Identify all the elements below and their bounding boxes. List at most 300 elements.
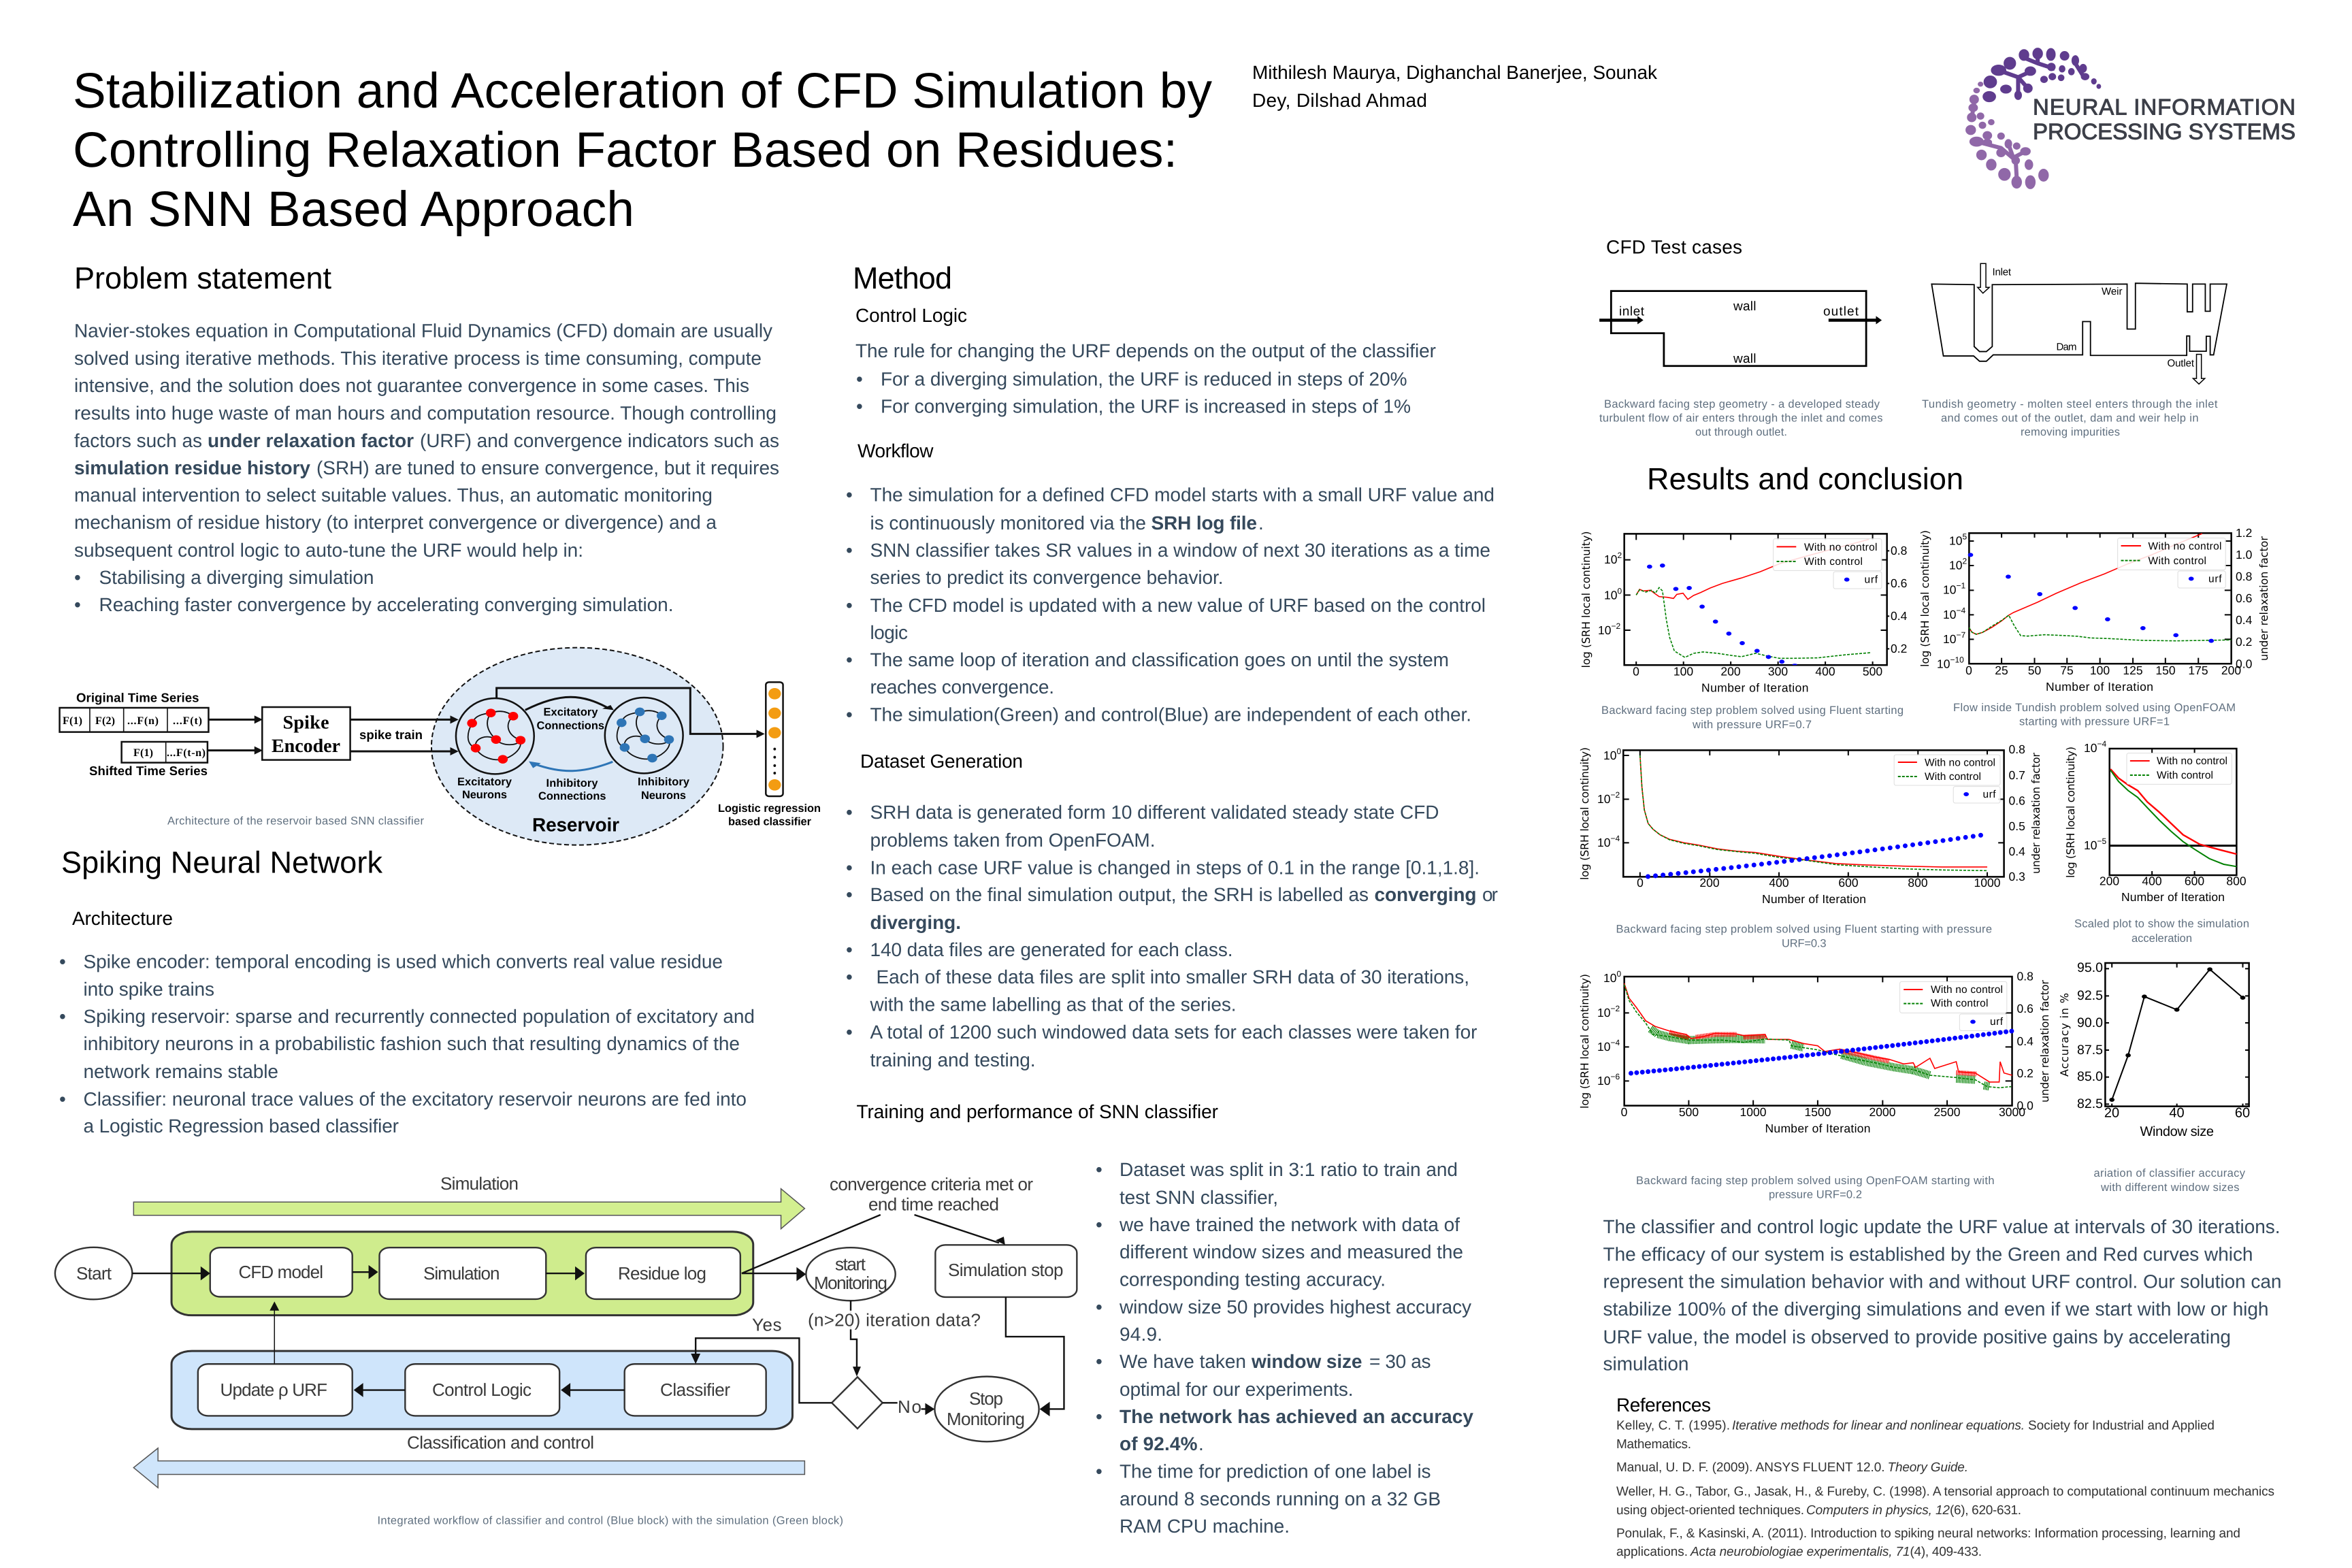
chart: backward step OpenFOAM URF 0.2: 10 [1603, 971, 1616, 985]
text block: workflow: SNN classifier takes SR values in a window of next 30 iterations as a time [870, 540, 1490, 561]
chart: classifier accuracy vs window size: 20 [2104, 1105, 2119, 1120]
chart: SNN classifier architecture diagram: Excitatory [543, 706, 598, 719]
chart: SNN classifier architecture diagram: Shifted Time Series [89, 764, 208, 778]
chart: backward step fluent URF 0.3: 10 [1603, 749, 1616, 762]
text block: training bullets: . [1198, 1433, 1204, 1454]
text block: dataset generation: Each of these data files are split into smaller SRH data of 30 iterations, [877, 966, 1469, 987]
chart: backward step fluent URF 0.3: 0.5 [2009, 819, 2025, 833]
chart: backward step fluent URF 0.7: 2 [1617, 551, 1622, 560]
chart: scaled acceleration plot: −4 [2097, 739, 2106, 749]
chart: tundish OpenFOAM URF 1: 175 [2188, 664, 2208, 677]
text block: dataset generation: • [846, 966, 853, 987]
text block: dataset generation [846, 802, 1498, 1071]
sub-heading: dataset generation: Dataset Generation [860, 751, 1023, 772]
chart: tundish OpenFOAM URF 1: 200 [2221, 664, 2241, 677]
chart: backward step OpenFOAM URF 0.2: 1500 [1805, 1105, 1831, 1119]
title: An SNN Based Approach [73, 182, 634, 237]
chart: backward step fluent URF 0.3: 10 [1597, 792, 1610, 806]
chart: backward step fluent URF 0.3: −4 [1610, 834, 1620, 843]
heading: references: References [1616, 1394, 1711, 1416]
chart: integrated workflow diagram: Simulation [423, 1263, 500, 1284]
chart: SNN classifier architecture diagram: ...F(t-n) [167, 747, 206, 759]
chart: SNN classifier architecture diagram: Connections [538, 790, 606, 802]
chart: backward step OpenFOAM URF 0.2: 2500 [1934, 1105, 1961, 1119]
text block: references list: Theory Guide. [1888, 1460, 1968, 1475]
chart: tundish OpenFOAM URF 1: 0.0 [2236, 657, 2253, 671]
chart: backward facing step geometry: inlet [1619, 305, 1645, 318]
text block: training bullets: test SNN classifier, [1120, 1187, 1278, 1208]
chart: backward step fluent URF 0.3: 800 [1908, 876, 1928, 889]
text block: dataset generation: diverging. [870, 912, 961, 933]
sub-heading: control logic: Control Logic [855, 305, 967, 326]
text block: problem statement: manual intervention to select suitable values. Thus, an automatic monitoring [74, 485, 713, 506]
chart: scaled acceleration plot: With no control [2157, 755, 2227, 767]
chart: SNN classifier architecture diagram: ...F(t) [173, 715, 202, 727]
text block: workflow: The simulation for a defined CFD model starts with a small URF value and [870, 485, 1494, 505]
chart: SNN classifier architecture diagram: based classifier [728, 815, 812, 828]
text block: dataset generation: In each case URF value is changed in steps of 0.1 in the range [0.1,1.8]. [870, 858, 1480, 878]
title [73, 63, 1213, 237]
text block: training bullets: • [1096, 1159, 1102, 1180]
chart: tundish OpenFOAM URF 1: 10 [1949, 558, 1962, 572]
chart: backward step OpenFOAM URF 0.2: 2000 [1869, 1105, 1896, 1119]
chart: integrated workflow diagram: (n>20) iteration data? [808, 1309, 981, 1330]
chart: SNN classifier architecture diagram: ...F(n) [127, 715, 159, 727]
text block: references list [1616, 1418, 2274, 1559]
caption: chart 5: Backward facing step problem solved using OpenFOAM starting with [1636, 1175, 1994, 1187]
heading: CFD test cases: CFD Test cases [1606, 237, 1742, 257]
chart: integrated workflow diagram: Simulation stop [948, 1260, 1063, 1280]
text block: SNN bullets: a Logistic Regression based classifier [83, 1115, 399, 1137]
chart: backward step OpenFOAM URF 0.2: 0.2 [2017, 1066, 2034, 1080]
text block: SNN bullets [59, 951, 755, 1137]
chart: integrated workflow diagram: Simulation [440, 1173, 519, 1194]
chart: backward facing step geometry: wall [1733, 299, 1756, 314]
chart: integrated workflow diagram: Classification and control [407, 1432, 594, 1452]
chart: backward step fluent URF 0.3: under relaxation factor [2029, 753, 2042, 874]
chart: SNN classifier architecture diagram: Reservoir [532, 814, 619, 836]
text block: problem statement: • [74, 594, 81, 615]
text block: references list: Ponulak, F., & Kasinski, A. (2011). Introduction to spiking neural networks: Information processing, learning and [1616, 1526, 2240, 1541]
text block: references list: Computers in physics, 12 [1806, 1503, 1950, 1518]
text block: training bullets: around 8 seconds running on a 32 GB [1120, 1488, 1441, 1509]
caption: tundish geometry [1922, 398, 2218, 438]
text block: training bullets: • [1096, 1296, 1102, 1318]
chart: backward step OpenFOAM URF 0.2: urf [1990, 1016, 2004, 1028]
chart: backward step OpenFOAM URF 0.2: 0.8 [2017, 969, 2034, 983]
chart: classifier accuracy vs window size: 60 [2235, 1105, 2250, 1120]
text block: dataset generation: or [1482, 884, 1498, 905]
chart: backward step OpenFOAM URF 0.2: log (SRH local continuity) [1578, 974, 1591, 1109]
chart: SNN classifier architecture diagram [60, 648, 821, 845]
chart: backward step OpenFOAM URF 0.2: 0.4 [2017, 1034, 2034, 1048]
caption: chart 3: Backward facing step problem solved using Fluent starting with pressure [1616, 923, 1992, 935]
chart: tundish OpenFOAM URF 1 [1918, 526, 2270, 693]
chart: classifier accuracy vs window size: 90.0 [2077, 1015, 2103, 1030]
chart: classifier accuracy vs window size: 85.0 [2077, 1069, 2103, 1084]
text block: training bullets: RAM CPU machine. [1120, 1516, 1290, 1537]
text block: problem statement: Navier-stokes equation in Computational Fluid Dynamics (CFD) domain are usually [74, 320, 772, 342]
text block: workflow: series to predict its convergence behavior. [870, 567, 1224, 588]
text block: dataset generation: 140 data files are generated for each class. [870, 939, 1233, 960]
chart: classifier accuracy vs window size: 92.5 [2077, 988, 2103, 1003]
text block: dataset generation: problems taken from OpenFOAM. [870, 830, 1156, 851]
reservoir shapes [60, 648, 783, 845]
chart: integrated workflow diagram [55, 1173, 1077, 1488]
chart: scaled acceleration plot: log (SRH local continuity) [2064, 747, 2077, 878]
chart: backward step fluent URF 0.7: 0.4 [1891, 609, 1908, 623]
chart: scaled acceleration plot: With control [2157, 770, 2213, 781]
text block: SNN bullets: Spiking reservoir: sparse and recurrently connected population of excitatory and [83, 1006, 755, 1027]
chart: backward step fluent URF 0.3 [1578, 742, 2042, 906]
chart: scaled acceleration plot: −5 [2097, 836, 2106, 846]
text block: references list: Acta neurobiologiae experimentalis, 71 [1690, 1545, 1910, 1559]
chart: scaled acceleration plot: 800 [2226, 874, 2247, 887]
text block: conclusion: represent the simulation behavior with and without URF control. Our solution can [1603, 1271, 2281, 1292]
chart: tundish OpenFOAM URF 1: −1 [1956, 581, 1965, 591]
text block: dataset generation: SRH data is generated form 10 different validated steady state CFD [870, 802, 1439, 823]
chart: backward step fluent URF 0.3: 0 [1637, 876, 1644, 889]
chart: backward step fluent URF 0.7 [1580, 531, 1908, 694]
chart: backward step fluent URF 0.7: 0 [1617, 587, 1622, 596]
text block: SNN bullets: inhibitory neurons in a probabilistic fashion such that resulting dynamics of the [83, 1033, 740, 1054]
chart: tundish OpenFOAM URF 1: 25 [1995, 664, 2008, 677]
chart: SNN classifier architecture diagram: Spike [283, 712, 329, 734]
sub-heading: workflow: Workflow [858, 440, 934, 461]
sub-heading: architecture: Architecture [72, 908, 173, 929]
text block: dataset generation: with the same labelling as that of the series. [870, 994, 1236, 1015]
text block: workflow: SRH log file [1152, 512, 1257, 534]
chart: backward step fluent URF 0.3: With control [1925, 771, 1981, 783]
text block: references list: Society for Industrial and Applied [2028, 1418, 2215, 1433]
chart: classifier accuracy vs window size: 95.0 [2077, 960, 2103, 975]
text block: SNN bullets: into spike trains [83, 979, 214, 1000]
text block: control logic: The rule for changing the URF depends on the output of the classifier [855, 340, 1436, 361]
chart: tundish OpenFOAM URF 1: 75 [2060, 664, 2074, 677]
chart: backward step fluent URF 0.3: 200 [1699, 876, 1720, 889]
chart: backward step OpenFOAM URF 0.2: With no control [1931, 984, 2003, 996]
caption: tundish geometry: Tundish geometry - molten steel enters through the inlet [1922, 398, 2218, 410]
chart: backward step fluent URF 0.3: 0.7 [2009, 768, 2025, 782]
icon: logo dots [1966, 48, 2100, 189]
chart: backward step fluent URF 0.7: With no control [1804, 542, 1877, 553]
logo: neural information processing systems [1966, 48, 2296, 189]
text block: references list: Manual, U. D. F. (2009). ANSYS FLUENT 12.0. [1616, 1460, 1885, 1475]
text block: dataset generation: • [846, 858, 853, 878]
chart: backward facing step geometry: outlet [1823, 305, 1859, 318]
chart: integrated workflow diagram: convergence criteria met or [830, 1174, 1033, 1194]
title: Stabilization and Acceleration of CFD Simulation by [73, 63, 1213, 118]
chart: backward step fluent URF 0.3: With no control [1925, 757, 1995, 769]
chart: scaled acceleration plot: 400 [2142, 874, 2162, 887]
authors: Mithilesh Maurya, Dighanchal Banerjee, Sounak [1252, 62, 1658, 83]
chart: tundish OpenFOAM URF 1: under relaxation factor [2257, 536, 2270, 661]
chart: integrated workflow diagram: start [835, 1254, 866, 1274]
caption: step geometry [1599, 398, 1882, 438]
text block: workflow: • [846, 540, 853, 561]
chart: backward step fluent URF 0.7: 10 [1598, 623, 1611, 637]
text block: conclusion: The classifier and control logic update the URF value at intervals of 30 iterations. [1603, 1216, 2280, 1237]
text block: problem statement: factors such as [74, 430, 202, 451]
chart: backward step fluent URF 0.7: 10 [1604, 553, 1617, 566]
chart: backward step OpenFOAM URF 0.2: 10 [1597, 1040, 1610, 1054]
chart: tundish OpenFOAM URF 1: 50 [2028, 664, 2041, 677]
chart: backward step fluent URF 0.3: 0.8 [2009, 742, 2025, 756]
text block: training bullets: Dataset was split in 3:1 ratio to train and [1120, 1159, 1458, 1180]
chart: classifier accuracy vs window size: 82.5 [2077, 1096, 2103, 1111]
chart: backward step fluent URF 0.3: 10 [1597, 836, 1610, 849]
chart: backward step OpenFOAM URF 0.2 [1578, 969, 2051, 1135]
text block: problem statement: simulation residue history [74, 457, 310, 478]
text block: workflow: • [846, 595, 853, 616]
chart: backward step fluent URF 0.7: Number of Iteration [1701, 681, 1809, 694]
chart: tundish OpenFOAM URF 1: 10 [1943, 583, 1956, 596]
chart: backward step fluent URF 0.7: 0.6 [1891, 576, 1907, 590]
chart: backward step fluent URF 0.7: 0.2 [1891, 642, 1907, 655]
heading: method: Method [853, 261, 952, 295]
chart: backward step fluent URF 0.3: 0.4 [2009, 845, 2025, 858]
text block: training bullets: we have trained the network with data of [1119, 1214, 1460, 1235]
text block: workflow: The same loop of iteration and classification goes on until the system [870, 649, 1449, 670]
chart: tundish OpenFOAM URF 1: −7 [1956, 630, 1965, 640]
text block: problem statement: solved using iterative methods. This iterative process is time consuming, compute [74, 348, 762, 369]
chart: scaled acceleration plot: 200 [2100, 874, 2119, 887]
text block: conclusion [1603, 1216, 2281, 1375]
chart: backward facing step geometry [1599, 291, 1882, 366]
text block: problem statement: (SRH) are tuned to ensure convergence, but it requires [316, 457, 779, 478]
chart: backward step fluent URF 0.3: 0.3 [2009, 870, 2025, 883]
text block: conclusion: simulation [1603, 1353, 1689, 1375]
caption: chart 2 [1953, 702, 2236, 728]
text block: dataset generation: • [846, 939, 853, 960]
text block: SNN bullets: Classifier: neuronal trace values of the excitatory reservoir neurons are fed into [83, 1089, 747, 1109]
text block: problem statement: subsequent control logic to auto-tune the URF would help in: [74, 540, 583, 561]
text block: control logic [855, 340, 1436, 416]
chart: backward step fluent URF 0.3: log (SRH local continuity) [1578, 747, 1591, 880]
chart: tundish OpenFOAM URF 1: 100 [2090, 664, 2110, 677]
chart: backward step OpenFOAM URF 0.2: 10 [1597, 1006, 1610, 1019]
chart: backward step fluent URF 0.7: 200 [1720, 664, 1741, 678]
chart: tundish OpenFOAM URF 1: 10 [1943, 632, 1956, 646]
text block: SNN bullets: • [59, 1089, 66, 1109]
text block: training bullets: window size 50 provides highest accuracy [1119, 1296, 1471, 1318]
text block: problem statement [74, 320, 779, 615]
chart: integrated workflow diagram: Monitoring [814, 1273, 887, 1293]
text block: problem statement: results into huge waste of man hours and computation resource. Though controlling [74, 403, 777, 423]
text block: conclusion: stabilize 100% of the diverging simulations and even if we start with low or high [1603, 1298, 2269, 1320]
chart: backward facing step geometry: wall [1733, 352, 1756, 366]
chart: tundish OpenFOAM URF 1: 0.4 [2236, 613, 2253, 627]
chart: backward step OpenFOAM URF 0.2: 0 [1616, 969, 1621, 979]
chart: tundish OpenFOAM URF 1: With no control [2148, 540, 2221, 553]
chart: tundish OpenFOAM URF 1: 125 [2123, 664, 2143, 677]
chart: SNN classifier architecture diagram: Encoder [272, 736, 340, 757]
caption: chart 3 [1616, 923, 1992, 950]
text block: workflow: • [846, 485, 853, 505]
text block: dataset generation: • [846, 802, 853, 823]
chart: backward step fluent URF 0.3: 600 [1838, 876, 1859, 889]
text block: problem statement: • [74, 567, 81, 588]
caption: chart 2: starting with pressure URF=1 [2019, 716, 2170, 728]
text block: problem statement: intensive, and the solution does not guarantee convergence in some cases. This [74, 375, 749, 396]
text block: training bullets: The time for prediction of one label is [1120, 1460, 1431, 1482]
sub-heading: training and performance: Training and performance of SNN classifier [856, 1101, 1218, 1122]
text block: workflow: logic [870, 622, 908, 643]
chart: tundish OpenFOAM URF 1: −4 [1956, 606, 1965, 615]
caption: chart 5 [1636, 1175, 1994, 1200]
logo: neural information processing systems: PROCESSING SYSTEMS [2033, 118, 2296, 144]
chart: backward step OpenFOAM URF 0.2: Number of Iteration [1765, 1122, 1870, 1135]
text block: SNN bullets: network remains stable [83, 1061, 278, 1082]
chart: SNN classifier architecture diagram: F(2) [95, 715, 115, 727]
chart: scaled acceleration plot: Number of Iteration [2121, 890, 2225, 904]
heading: results and conclusion: Results and conclusion [1647, 461, 1963, 496]
chart: backward step fluent URF 0.3: 400 [1769, 876, 1789, 889]
text block: dataset generation: • [846, 1022, 853, 1043]
chart: SNN classifier architecture diagram: Neurons [462, 789, 507, 801]
caption: chart 4: acceleration [2132, 932, 2192, 945]
text block: training bullets: 94.9. [1120, 1324, 1162, 1345]
chart: integrated workflow diagram: CFD model [238, 1262, 323, 1282]
chart: backward step fluent URF 0.3: −2 [1610, 790, 1620, 800]
chart: backward step fluent URF 0.7: 100 [1673, 664, 1693, 678]
text block: control logic: For a diverging simulation, the URF is reduced in steps of 20% [881, 369, 1407, 389]
caption: step geometry: out through outlet. [1695, 426, 1787, 438]
chart: integrated workflow diagram: Control Logic [432, 1379, 532, 1400]
text block: SNN bullets: • [59, 1006, 66, 1027]
text block: training bullets: of 92.4% [1120, 1433, 1198, 1454]
caption: chart 4: Scaled plot to show the simulation [2074, 917, 2249, 930]
caption: tundish geometry: and comes out of the outlet, dam and weir help in [1941, 412, 2198, 425]
chart: backward step OpenFOAM URF 0.2: With control [1931, 998, 1989, 1009]
text block: training bullets: window size [1251, 1351, 1362, 1372]
chart: SNN classifier architecture diagram: Inhibitory [638, 776, 690, 788]
caption: chart 1: with pressure URF=0.7 [1692, 719, 1812, 731]
text block: workflow: The simulation(Green) and control(Blue) are independent of each other. [870, 704, 1471, 725]
text block: control logic: For converging simulation, the URF is increased in steps of 1% [881, 396, 1411, 416]
heading: spiking neural network: Spiking Neural Network [61, 845, 382, 879]
chart: SNN classifier architecture diagram: Logistic regression [718, 802, 821, 815]
text block: training bullets: different window sizes and measured the [1120, 1241, 1463, 1262]
text block: problem statement: Stabilising a diverging simulation [99, 567, 374, 588]
caption: workflow: Integrated workflow of classifier and control (Blue block) with the simulation (Green block) [377, 1515, 843, 1527]
text block: problem statement: mechanism of residue history (to interpret convergence or divergence) and a [74, 512, 717, 533]
chart: classifier accuracy vs window size: 40 [2169, 1105, 2185, 1120]
chart: backward step fluent URF 0.7: 10 [1604, 588, 1617, 602]
chart: tundish OpenFOAM URF 1: 10 [1937, 657, 1950, 671]
text block: training bullets: • [1096, 1351, 1102, 1372]
text block: references list: Weller, H. G., Tabor, G., Jasak, H., & Fureby, C. (1998). A tensorial approach to computational continuum mechanics [1616, 1485, 2274, 1499]
chart: backward step fluent URF 0.3: 0 [1616, 747, 1621, 756]
chart: SNN classifier architecture diagram: Inhibitory [546, 777, 598, 789]
chart: integrated workflow diagram: end time reached [868, 1194, 999, 1214]
chart: tundish OpenFOAM URF 1: Number of Iteration [2046, 680, 2153, 693]
chart: backward step fluent URF 0.7: 500 [1863, 664, 1882, 678]
text block: references list: Iterative methods for linear and nonlinear equations. [1732, 1418, 2025, 1433]
chart: integrated workflow diagram: No [898, 1396, 921, 1417]
text block: references list: Mathematics. [1616, 1437, 1691, 1452]
authors [1252, 62, 1658, 111]
chart: tundish OpenFOAM URF 1: 150 [2155, 664, 2176, 677]
text block: training bullets: The network has achieved an accuracy [1120, 1406, 1473, 1427]
text block: training bullets: optimal for our experiments. [1120, 1379, 1353, 1400]
text block: SNN bullets: • [59, 951, 66, 972]
chart: backward step fluent URF 0.3: urf [1983, 789, 1996, 800]
text block: dataset generation: A total of 1200 such windowed data sets for each classes were taken for [870, 1022, 1477, 1043]
chart: tundish OpenFOAM URF 1: urf [2208, 573, 2222, 585]
chart: backward step OpenFOAM URF 0.2: 0.6 [2017, 1002, 2034, 1015]
caption: tundish geometry: removing impurities [2021, 426, 2120, 438]
text block: training bullets: • [1096, 1460, 1102, 1482]
chart: backward step fluent URF 0.7: 0.8 [1891, 544, 1907, 557]
chart: tundish OpenFOAM URF 1: 10 [1943, 608, 1956, 621]
chart: tundish OpenFOAM URF 1: 0.2 [2236, 635, 2252, 649]
chart: scaled acceleration plot: 10 [2084, 838, 2097, 852]
chart: classifier accuracy vs window size [2058, 960, 2250, 1139]
chart: tundish geometry: Inlet [1993, 267, 2012, 278]
text block: training bullets: • [1096, 1406, 1102, 1427]
chart: tundish geometry: Dam [2057, 342, 2077, 353]
text block: workflow: . [1258, 512, 1264, 534]
workflow shapes [55, 1189, 1077, 1488]
text block: conclusion: URF value, the model is observed to provide positive gains by accelerating [1603, 1326, 2231, 1348]
caption: chart 6: with different window sizes [2100, 1181, 2239, 1194]
caption: chart 1: Backward facing step problem solved using Fluent starting [1601, 704, 1904, 717]
chart: SNN classifier architecture diagram: F(1) [63, 715, 82, 727]
chart: integrated workflow diagram: Start [76, 1263, 112, 1284]
text block: problem statement: under relaxation factor [208, 430, 414, 451]
text block: workflow: • [846, 649, 853, 670]
text block: workflow: • [846, 704, 853, 725]
text block: workflow: reaches convergence. [870, 676, 1054, 698]
chart: SNN classifier architecture diagram: Connections [536, 720, 604, 732]
text block: workflow: The CFD model is updated with a new value of URF based on the control [870, 595, 1486, 616]
chart: backward step OpenFOAM URF 0.2: −4 [1610, 1038, 1620, 1047]
chart: integrated workflow diagram: Stop [969, 1388, 1003, 1409]
chart: backward step OpenFOAM URF 0.2: 0 [1621, 1105, 1628, 1119]
chart: SNN classifier architecture diagram: spike train [359, 728, 423, 742]
chart: backward step fluent URF 0.7: 400 [1815, 664, 1835, 678]
chart: classifier accuracy vs window size: 87.5 [2077, 1043, 2103, 1058]
chart: tundish OpenFOAM URF 1: 0.8 [2236, 570, 2252, 583]
chart: tundish OpenFOAM URF 1: log (SRH local continuity) [1918, 530, 1931, 667]
text block: SNN bullets: Spike encoder: temporal encoding is used which converts real value residue [83, 951, 723, 972]
text block: references list: using object-oriented techniques. [1616, 1503, 1804, 1518]
chart: tundish OpenFOAM URF 1: 0.6 [2236, 591, 2252, 605]
caption: chart 1 [1601, 704, 1904, 731]
chart: tundish OpenFOAM URF 1: 0 [1965, 664, 1972, 677]
chart: backward step OpenFOAM URF 0.2: −6 [1610, 1072, 1620, 1081]
chart: classifier accuracy vs window size: Accuracy in % [2058, 993, 2071, 1077]
text block: dataset generation: converging [1375, 884, 1477, 905]
text block: workflow: is continuously monitored via the [870, 512, 1146, 534]
chart: scaled acceleration plot: 10 [2084, 741, 2097, 755]
title: Controlling Relaxation Factor Based on Residues: [73, 122, 1177, 178]
text block: control logic: • [856, 396, 863, 416]
caption: step geometry: turbulent flow of air enters through the inlet and comes [1599, 412, 1882, 425]
chart: scaled acceleration plot: 600 [2185, 874, 2204, 887]
heading: problem statement: Problem statement [74, 261, 331, 295]
authors: Dey, Dilshad Ahmad [1252, 90, 1427, 111]
text block: training bullets: • [1096, 1214, 1102, 1235]
chart: integrated workflow diagram: Residue log [618, 1263, 706, 1284]
chart: backward step OpenFOAM URF 0.2: 0.0 [2017, 1098, 2034, 1112]
chart: integrated workflow diagram: Update ρ URF [220, 1379, 327, 1400]
chart: SNN classifier architecture diagram: F(1) [133, 747, 153, 759]
chart: backward step fluent URF 0.7: 300 [1768, 664, 1788, 678]
chart: tundish OpenFOAM URF 1: 1.0 [2236, 548, 2253, 561]
chart: tundish OpenFOAM URF 1: With control [2148, 555, 2206, 567]
